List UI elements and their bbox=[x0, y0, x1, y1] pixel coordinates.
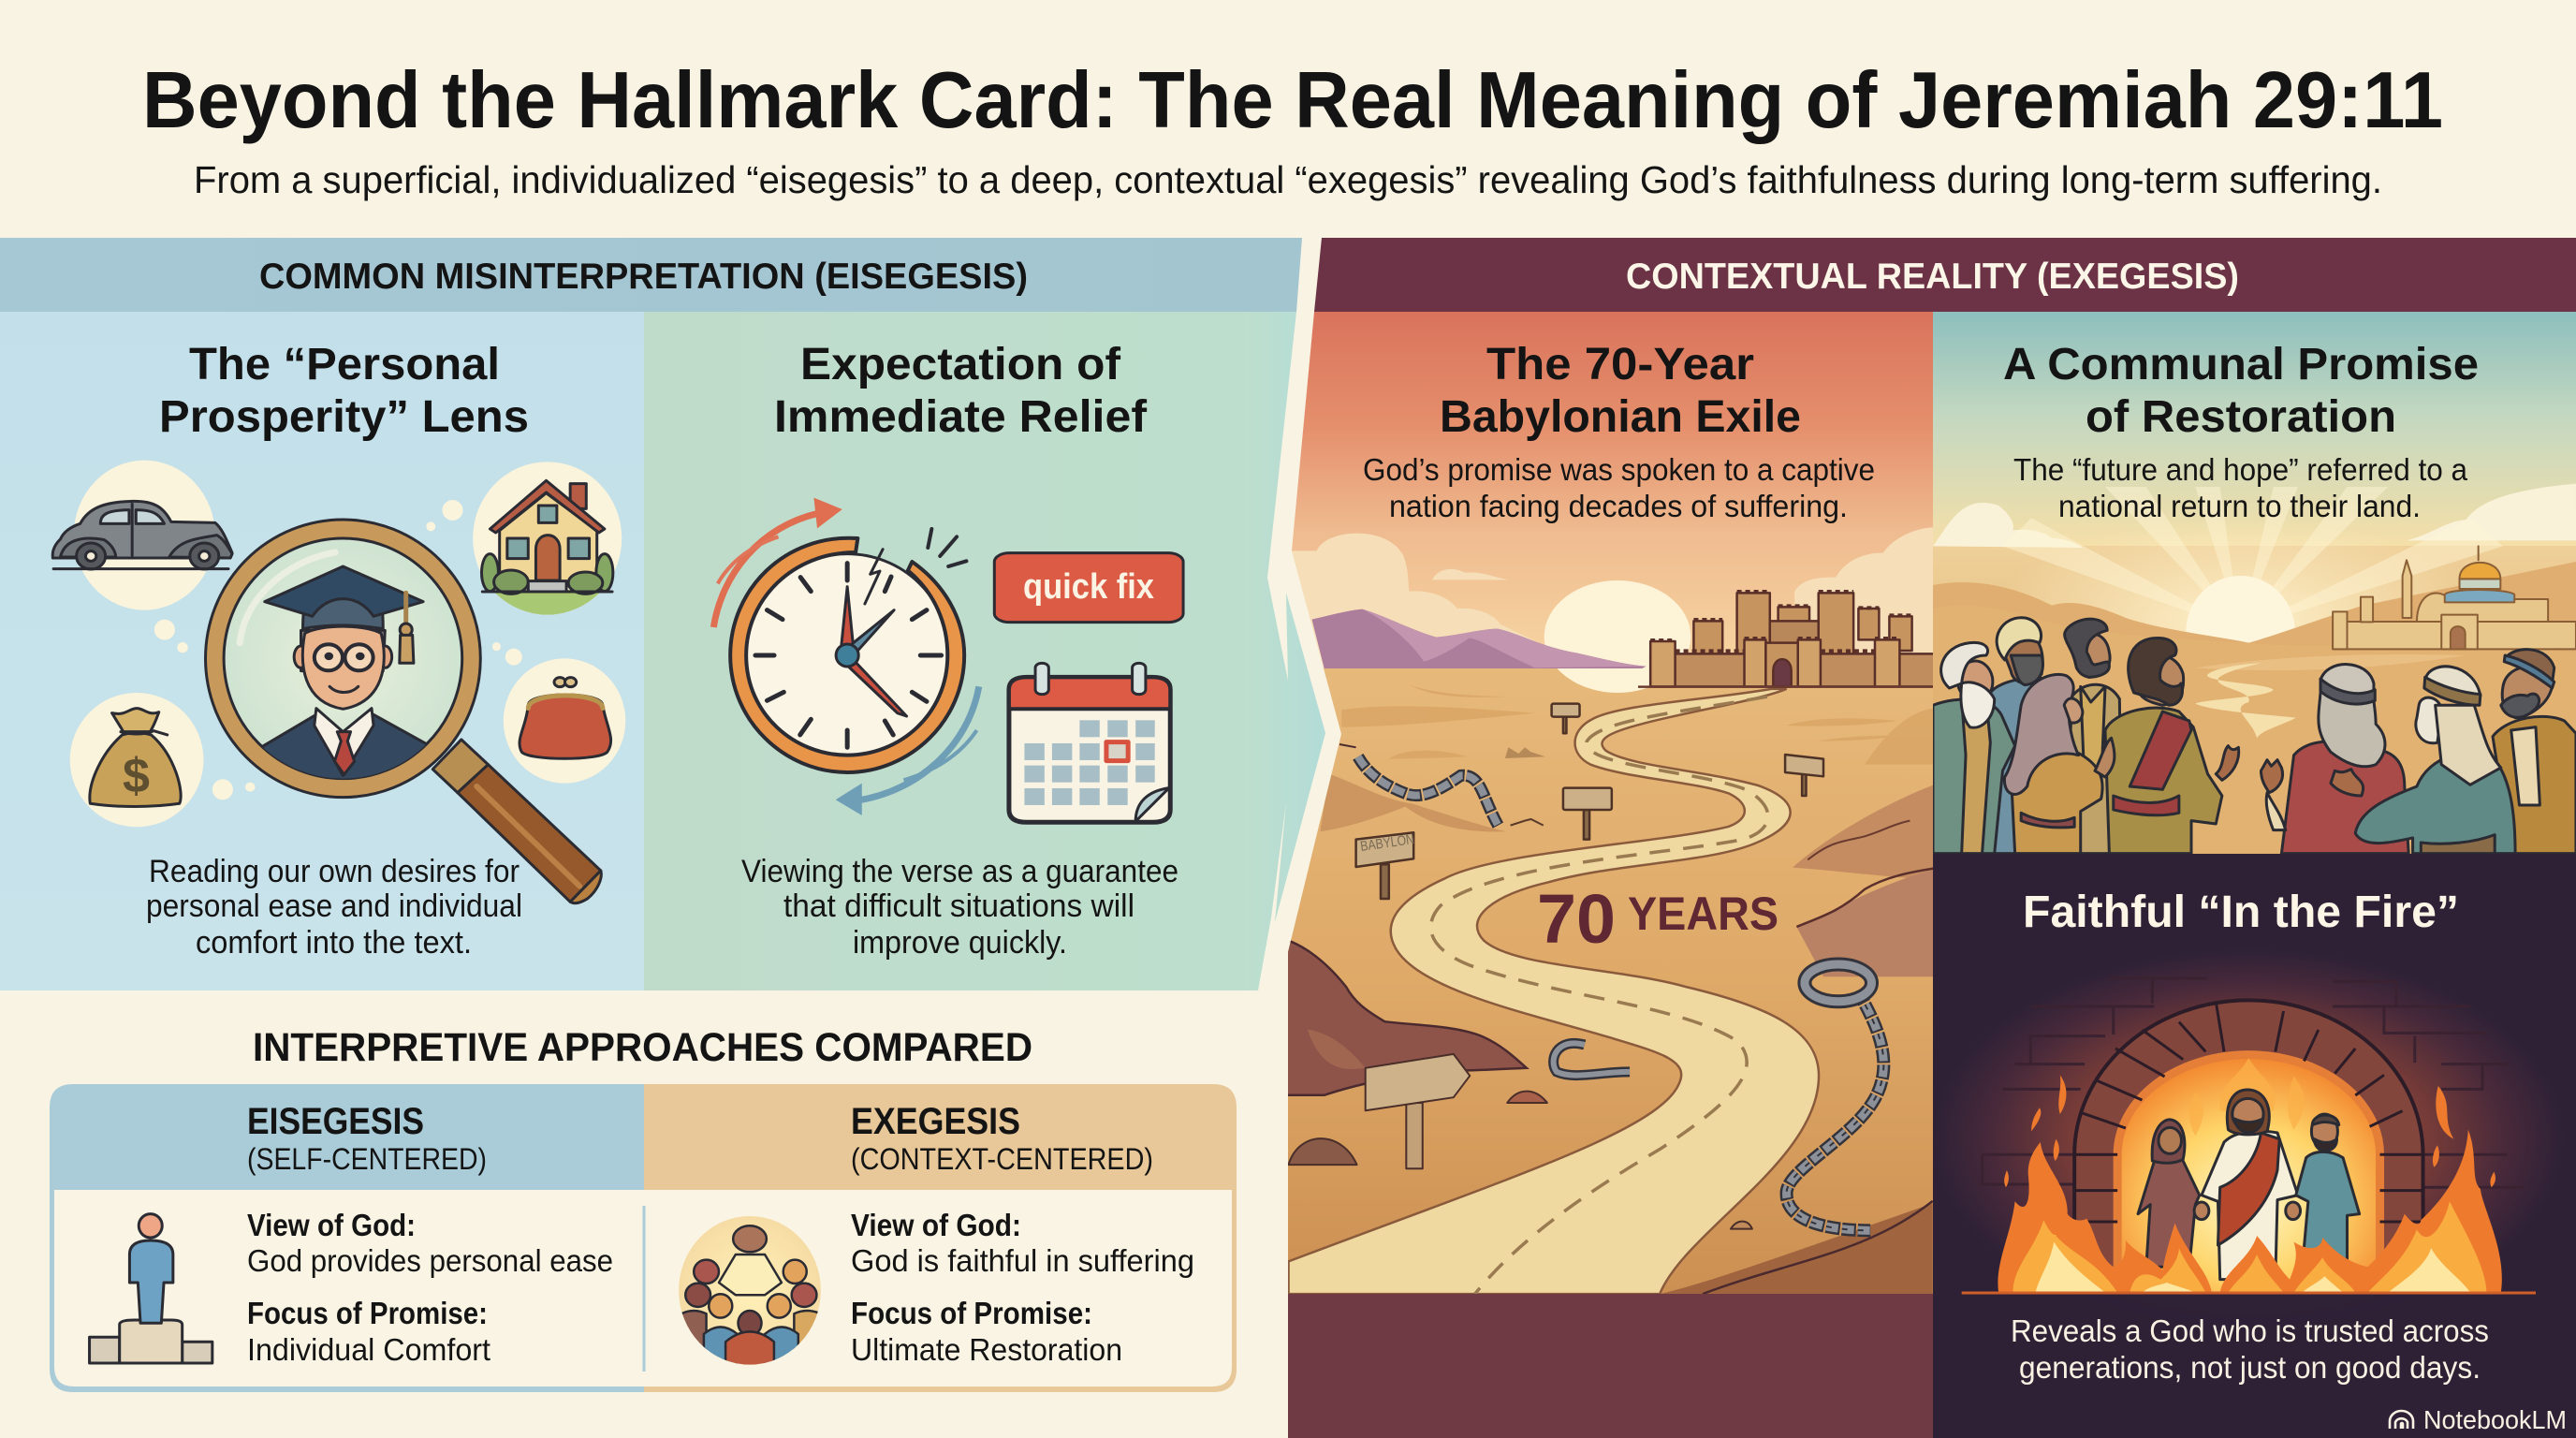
button: quick fix bbox=[994, 553, 1183, 623]
icon: community around Christ bbox=[679, 1216, 821, 1370]
figure: elder with turban bbox=[1992, 676, 2042, 854]
icon: calendar bbox=[1009, 663, 1170, 822]
wall bricks bbox=[1983, 978, 2524, 1187]
figure: woman in scarf bbox=[2011, 749, 2102, 854]
panel: expectation of immediate relief: improve quickly. bbox=[853, 925, 1067, 961]
panel: faithful in the fire: generations, not just on good days. bbox=[2019, 1350, 2481, 1385]
panel: personal prosperity lens: Prosperity” Lens bbox=[159, 392, 529, 442]
arrows around the clock bbox=[713, 513, 979, 800]
subtitle: From a superficial, individualized “eisegesis” to a deep, contextual “exegesis” revealing God’s faithfulness during long-term suffering. bbox=[194, 158, 2382, 201]
figure: man in olive with red sash bbox=[2105, 708, 2222, 854]
arch stones bbox=[2074, 1000, 2423, 1293]
icon: money bag bbox=[90, 709, 181, 807]
panel: expectation of immediate relief: Immediate Relief bbox=[774, 392, 1148, 442]
dollar sign on money bag: $ bbox=[123, 749, 150, 803]
large chain and shackles bbox=[1554, 964, 1883, 1230]
panel: faithful in the fire bbox=[1933, 854, 2576, 1438]
column: eisegesis bbox=[90, 1101, 613, 1367]
panel: personal prosperity lens: Reading our own desires for bbox=[149, 854, 520, 889]
people group right bbox=[2261, 650, 2576, 854]
comparison table frame bbox=[50, 1084, 1237, 1392]
sky, sun, clouds, mountains bbox=[1288, 527, 1934, 693]
callout: 70 years: YEARS bbox=[1628, 888, 1778, 940]
panel: expectation of immediate relief: that difficult situations will bbox=[783, 888, 1134, 924]
panel: expectation of immediate relief: quick fix bbox=[1023, 567, 1154, 607]
column: eisegesis: (SELF-CENTERED) bbox=[247, 1142, 487, 1176]
logo: NotebookLM: NotebookLM bbox=[2423, 1405, 2567, 1434]
panel: the 70-year Babylonian exile: nation facing decades of suffering. bbox=[1389, 489, 1848, 523]
section band: exegesis bbox=[1314, 238, 2576, 312]
flames bbox=[1998, 1075, 2502, 1293]
panel: communal promise of restoration bbox=[1933, 312, 2576, 854]
figures bbox=[2138, 1090, 2360, 1280]
column: exegesis bbox=[679, 1101, 1194, 1370]
panel: communal promise of restoration: A Communal Promise bbox=[2003, 340, 2479, 389]
panel: personal prosperity lens: personal ease and individual bbox=[146, 888, 522, 924]
river bbox=[2195, 663, 2296, 738]
icon: clock bbox=[730, 529, 966, 772]
panel: faithful in the fire: Faithful “In the Fire” bbox=[2023, 888, 2459, 937]
figure: elder in green bbox=[1933, 699, 2015, 854]
column: exegesis: Ultimate Restoration bbox=[851, 1332, 1122, 1367]
column: eisegesis: God provides personal ease bbox=[247, 1243, 613, 1278]
column: exegesis: Focus of Promise: bbox=[851, 1296, 1092, 1330]
panel: communal promise of restoration: The “future and hope” referred to a bbox=[2013, 452, 2468, 487]
column: eisegesis: Individual Comfort bbox=[247, 1332, 490, 1367]
callout: 70 years bbox=[1537, 880, 1778, 958]
column: exegesis: God is faithful in suffering bbox=[851, 1243, 1194, 1278]
column: exegesis: (CONTEXT-CENTERED) bbox=[851, 1142, 1153, 1176]
panel: the 70-year Babylonian exile: The 70-Year bbox=[1486, 340, 1754, 389]
panel: personal prosperity lens: comfort into the text. bbox=[196, 925, 472, 961]
city bbox=[2333, 546, 2576, 649]
panel: the 70-year Babylonian exile: God’s promise was spoken to a captive bbox=[1363, 452, 1875, 487]
figure: red-robed man from behind bbox=[2281, 741, 2408, 854]
panel: interpretive approaches compared: INTERPRETIVE APPROACHES COMPARED bbox=[253, 1025, 1032, 1070]
column: eisegesis: Focus of Promise: bbox=[247, 1296, 488, 1330]
panel: expectation of immediate relief: Viewing the verse as a guarantee bbox=[741, 854, 1178, 889]
column: exegesis: View of God: bbox=[851, 1208, 1021, 1242]
section band: eisegesis: COMMON MISINTERPRETATION (EISEGESIS) bbox=[259, 257, 1028, 297]
illustration: desert road and chains bbox=[1273, 312, 1939, 1294]
panel: interpretive approaches compared bbox=[50, 1025, 1237, 1392]
panel: expectation of immediate relief bbox=[644, 312, 1325, 990]
icon: magnifying glass bbox=[206, 520, 601, 903]
flame tongues inside opening bbox=[2189, 1058, 2305, 1136]
panel: common misinterpretation bbox=[0, 238, 1325, 990]
hills bbox=[1933, 562, 2576, 653]
castle, signs, small chain bbox=[1339, 592, 1939, 899]
section band: exegesis: CONTEXTUAL REALITY (EXEGESIS) bbox=[1626, 257, 2239, 297]
title: Beyond the Hallmark Card: The Real Meaning of Jeremiah 29:11 bbox=[142, 56, 2443, 145]
illustration: furnace with three figures bbox=[1933, 948, 2576, 1333]
panel: personal prosperity lens bbox=[0, 312, 644, 990]
sign text: Babylon: BABYLON bbox=[1359, 831, 1415, 855]
column: exegesis: EXEGESIS bbox=[851, 1101, 1020, 1142]
column: eisegesis: EISEGESIS bbox=[247, 1101, 424, 1142]
panel: faithful in the fire: Reveals a God who is trusted across bbox=[2011, 1313, 2489, 1348]
icon: car bbox=[52, 501, 232, 569]
column: eisegesis: View of God: bbox=[247, 1208, 416, 1242]
panel: communal promise of restoration: national return to their land. bbox=[2058, 489, 2421, 523]
road and lower foreground bbox=[1273, 689, 1933, 1294]
sky glow, sun rays, clouds bbox=[1933, 484, 2576, 730]
panel: personal prosperity lens: The “Personal bbox=[189, 340, 500, 389]
illustration: clock, button, calendar bbox=[713, 498, 1183, 822]
illustration: people looking toward Jerusalem bbox=[1933, 484, 2576, 854]
panel: expectation of immediate relief: Expectation of bbox=[800, 340, 1121, 389]
figure: teal-robed elder bbox=[2355, 752, 2515, 854]
figure: man in ochre bbox=[2493, 716, 2576, 854]
panel: the 70-year Babylonian exile: Babylonian Exile bbox=[1440, 392, 1801, 442]
section band: eisegesis bbox=[0, 238, 1302, 312]
icon: house bbox=[480, 479, 614, 615]
icon: figure on podium bbox=[90, 1214, 212, 1363]
people group left bbox=[1933, 618, 2239, 854]
panel: the 70-year Babylonian exile bbox=[1273, 312, 1939, 1438]
figure: dark haired man bbox=[2071, 683, 2121, 854]
illustration: desires around magnifier bbox=[52, 461, 633, 903]
sand patches and hills bbox=[1320, 685, 1934, 976]
icon: coin purse bbox=[520, 678, 611, 758]
callout: 70 years: 70 bbox=[1537, 880, 1616, 958]
panel: communal promise of restoration: of Restoration bbox=[2086, 392, 2396, 442]
